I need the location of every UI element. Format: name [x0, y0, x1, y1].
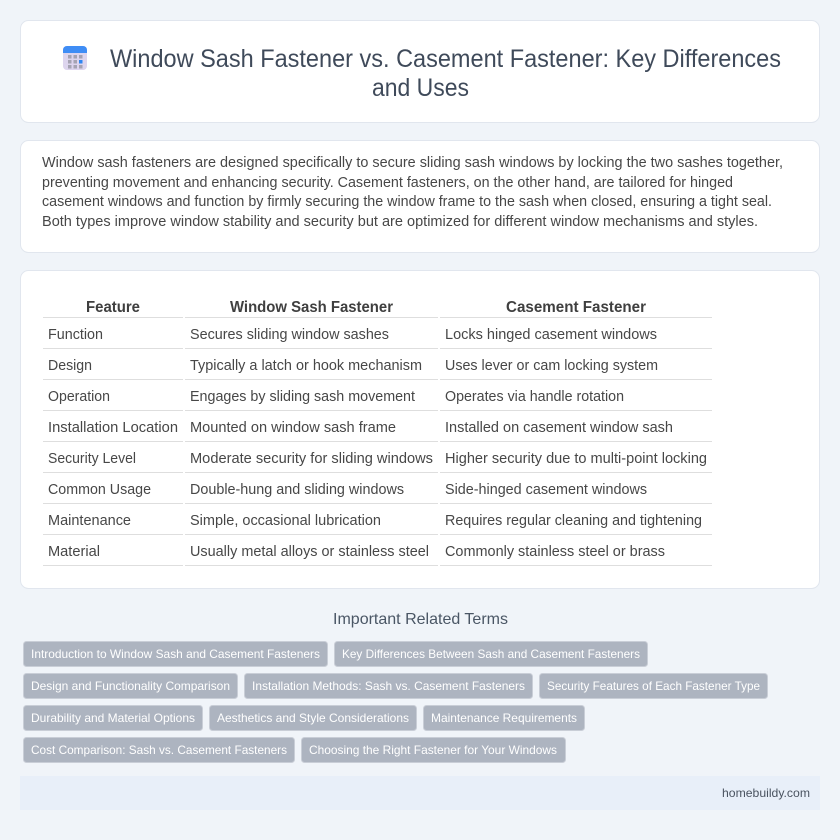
row: Material: Commonly stainless steel or brass — [445, 544, 665, 560]
row: Function — [48, 327, 657, 343]
row: Maintenance: Requires regular cleaning and tightening — [445, 513, 702, 529]
intro text — [42, 155, 783, 230]
row: Material: Usually metal alloys or stainless steel — [190, 544, 429, 560]
row: Function: Locks hinged casement windows — [445, 327, 657, 343]
title — [110, 45, 781, 102]
heading: related terms: Important Related Terms — [333, 611, 508, 628]
row: Material — [48, 544, 665, 560]
tag list: Introduction to Window Sash and Casement Fasteners — [31, 647, 320, 661]
table header: Casement Fastener — [506, 299, 646, 316]
row: Security Level: Moderate security for sliding windows — [190, 451, 433, 467]
row: Design: Uses lever or cam locking system — [445, 358, 658, 374]
intro text: preventing movement and enhancing security. Casement fasteners, on the other hand, are tailored for hinged — [42, 175, 733, 191]
table header: Feature — [86, 299, 140, 316]
row: Design: Typically a latch or hook mechanism — [190, 358, 422, 374]
tag list: Cost Comparison: Sash vs. Casement Fasteners — [31, 743, 287, 757]
table header: Window Sash Fastener — [230, 299, 393, 316]
tag list: Choosing the Right Fastener for Your Windows — [309, 743, 557, 757]
intro text: Window sash fasteners are designed specifically to secure sliding sash windows by locking the two sashes together, — [42, 155, 783, 171]
row: Installation Location — [48, 420, 673, 436]
intro text: Both types improve window stability and security but are optimized for different window mechanisms and styles. — [42, 214, 758, 230]
row: Design — [48, 358, 658, 374]
row: Common Usage: Common Usage — [48, 482, 151, 498]
panel: comparison table — [20, 270, 820, 588]
row: Installation Location: Installation Location — [48, 420, 178, 436]
tag list: Maintenance Requirements — [431, 711, 577, 725]
panel: introduction — [20, 140, 820, 252]
row: Maintenance — [48, 513, 702, 529]
row: Function: Secures sliding window sashes — [190, 327, 389, 343]
row: Common Usage: Double-hung and sliding windows — [190, 482, 404, 498]
row: Security Level: Security Level — [48, 451, 136, 467]
tag list: Durability and Material Options — [31, 711, 195, 725]
tag list — [24, 642, 768, 762]
row: Function: Function — [48, 327, 103, 343]
title: and Uses — [372, 74, 469, 102]
tag list: Design and Functionality Comparison — [31, 679, 230, 693]
row: Common Usage — [48, 482, 647, 498]
panel: header — [20, 20, 820, 122]
footer: homebuildy.com — [722, 786, 810, 800]
row: Installation Location: Mounted on window sash frame — [190, 420, 396, 436]
row: Security Level — [48, 451, 707, 467]
row: Maintenance: Simple, occasional lubrication — [190, 513, 381, 529]
row: Security Level: Higher security due to multi-point locking — [445, 451, 707, 467]
row: Maintenance: Maintenance — [48, 513, 131, 529]
row: Design: Design — [48, 358, 92, 374]
row: Operation: Operates via handle rotation — [445, 389, 624, 405]
tag list: Installation Methods: Sash vs. Casement Fasteners — [252, 679, 525, 693]
tag list: Aesthetics and Style Considerations — [217, 711, 409, 725]
footer — [20, 776, 820, 810]
row: Operation: Engages by sliding sash movement — [190, 389, 415, 405]
row: Operation: Operation — [48, 389, 110, 405]
tag list: Security Features of Each Fastener Type — [547, 679, 760, 693]
intro text: casement windows and function by firmly securing the window frame to the sash when closed, ensuring a tight seal. — [42, 194, 772, 210]
row: Operation — [48, 389, 624, 405]
row: Common Usage: Side-hinged casement windows — [445, 482, 647, 498]
row: Material: Material — [48, 544, 100, 560]
icon: calendar grid — [63, 46, 87, 70]
row: Installation Location: Installed on casement window sash — [445, 420, 673, 436]
title: Window Sash Fastener vs. Casement Fastener: Key Differences — [110, 45, 781, 73]
table header — [86, 299, 646, 316]
tag list: Key Differences Between Sash and Casement Fasteners — [342, 647, 640, 661]
